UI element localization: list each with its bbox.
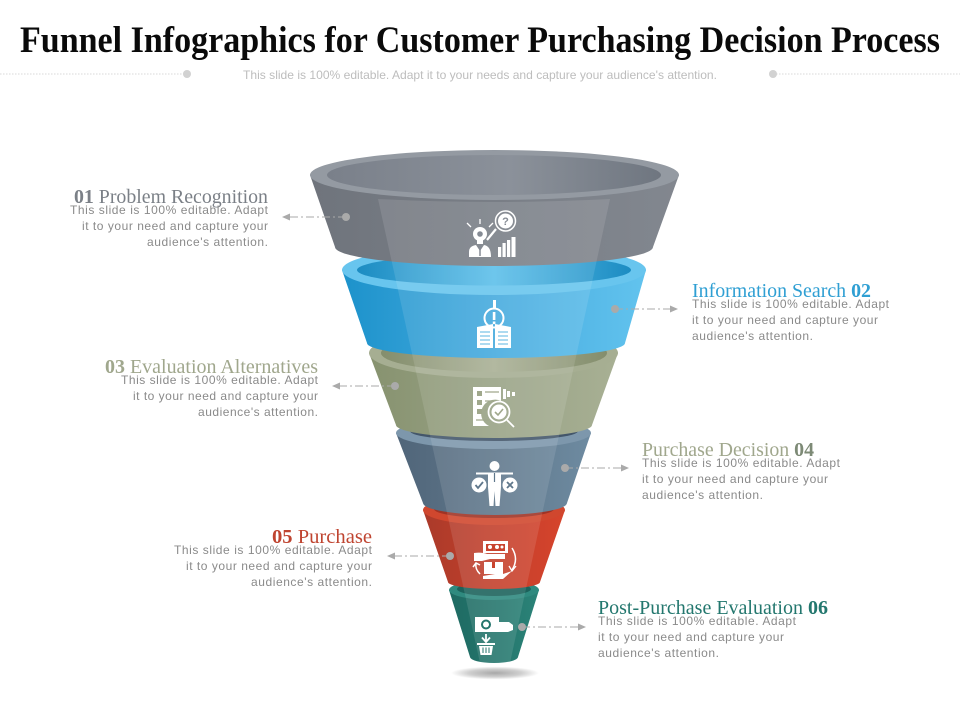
text block 06: Post-Purchase Evaluation 06 (598, 597, 828, 619)
text block 01 (70, 186, 269, 249)
funnel segment 5 (423, 495, 565, 589)
funnel segment 4 (396, 417, 591, 515)
icon: checklist and magnifier (473, 387, 515, 427)
text block 04: it to your need and capture your (642, 472, 828, 486)
leader arrow 5 (387, 552, 454, 560)
icon: idea and analysis: ? (502, 216, 509, 228)
text block 03: This slide is 100% editable. Adapt (121, 373, 319, 387)
center light beam (378, 199, 610, 663)
text block 06: This slide is 100% editable. Adapt (598, 614, 797, 628)
text block 05: it to your need and capture your (186, 559, 372, 573)
text block 03: it to your need and capture your (133, 389, 318, 403)
funnel shadow (451, 666, 539, 680)
leader arrow 1 (282, 213, 350, 221)
text block 02 (692, 280, 890, 343)
text block 06: audience's attention. (598, 646, 719, 660)
text block 05: This slide is 100% editable. Adapt (174, 543, 373, 557)
text block 03 (105, 356, 319, 419)
text block 04 (642, 439, 841, 502)
leader arrow 2 (611, 305, 678, 313)
leader arrow 6 (518, 623, 586, 631)
text block 01: This slide is 100% editable. Adapt (70, 203, 269, 217)
text block 04: audience's attention. (642, 488, 763, 502)
text block 02: Information Search 02 (692, 280, 871, 302)
text block 04: Purchase Decision 04 (642, 439, 814, 461)
icon: book and magnifier (477, 300, 511, 348)
text block 01: it to your need and capture your (82, 219, 268, 233)
icon: person weighing choices (472, 461, 518, 506)
text block 03: 03 Evaluation Alternatives (105, 356, 318, 378)
funnel segment 3 (369, 328, 618, 438)
funnel segment 6 (449, 580, 539, 663)
text block 02: This slide is 100% editable. Adapt (692, 297, 890, 311)
text block 02: it to your need and capture your (692, 313, 878, 327)
header rule: right (769, 70, 960, 78)
text block 03: audience's attention. (198, 405, 318, 419)
text block 01: audience's attention. (147, 235, 268, 249)
icon: idea and analysis (467, 211, 516, 257)
text block 04: This slide is 100% editable. Adapt (642, 456, 841, 470)
leader arrow 4 (561, 464, 629, 472)
funnel segment 1 (310, 150, 679, 266)
text block 05: audience's attention. (251, 575, 372, 589)
text block 05 (174, 526, 373, 589)
text block 02: audience's attention. (692, 329, 813, 343)
text block 01: 01 Problem Recognition (74, 186, 268, 208)
text block 06: it to your need and capture your (598, 630, 784, 644)
funnel segment 2 (342, 245, 646, 358)
icon: payment and basket (475, 617, 513, 655)
header rule: left (0, 70, 191, 78)
text block 06 (598, 597, 828, 660)
leader arrow 3 (332, 382, 399, 390)
icon: exchange of money and goods (473, 541, 516, 579)
subtitle: This slide is 100% editable. Adapt it to your needs and capture your audience's attention. (243, 68, 717, 82)
funnel (310, 150, 679, 680)
text block 05: 05 Purchase (272, 526, 372, 548)
